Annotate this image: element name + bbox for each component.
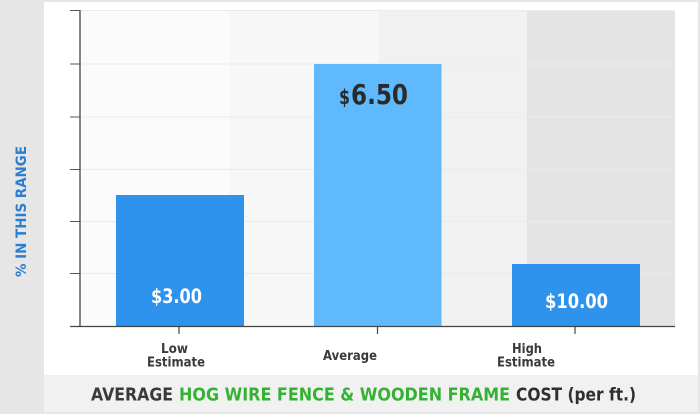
bar: average [314, 64, 442, 326]
chart background bands [81, 10, 675, 326]
footer title bar [44, 375, 698, 412]
y axis title: % IN THIS RANGE [14, 146, 30, 277]
y axis [70, 10, 80, 326]
x label: low estimate: Low [161, 341, 188, 357]
x label: low estimate [147, 341, 205, 370]
bar: high estimate [512, 264, 640, 326]
x label: high estimate: High [512, 341, 542, 357]
value: high estimate: $10.00 [545, 290, 608, 313]
footer title bar: AVERAGE [91, 384, 173, 406]
x label: high estimate [497, 341, 555, 370]
footer title bar: COST (per ft.) [516, 384, 636, 406]
x axis [70, 326, 675, 334]
x label: high estimate: Estimate [497, 354, 555, 370]
value: low estimate: $3.00 [151, 285, 202, 308]
value: average: 6.50 [351, 78, 408, 111]
footer title bar: HOG WIRE FENCE & WOODEN FRAME [179, 384, 510, 406]
x label: average: Average [323, 348, 377, 364]
bar: low estimate [116, 195, 244, 326]
x label: low estimate: Estimate [147, 354, 205, 370]
value: average dollar sign: $ [339, 85, 350, 109]
